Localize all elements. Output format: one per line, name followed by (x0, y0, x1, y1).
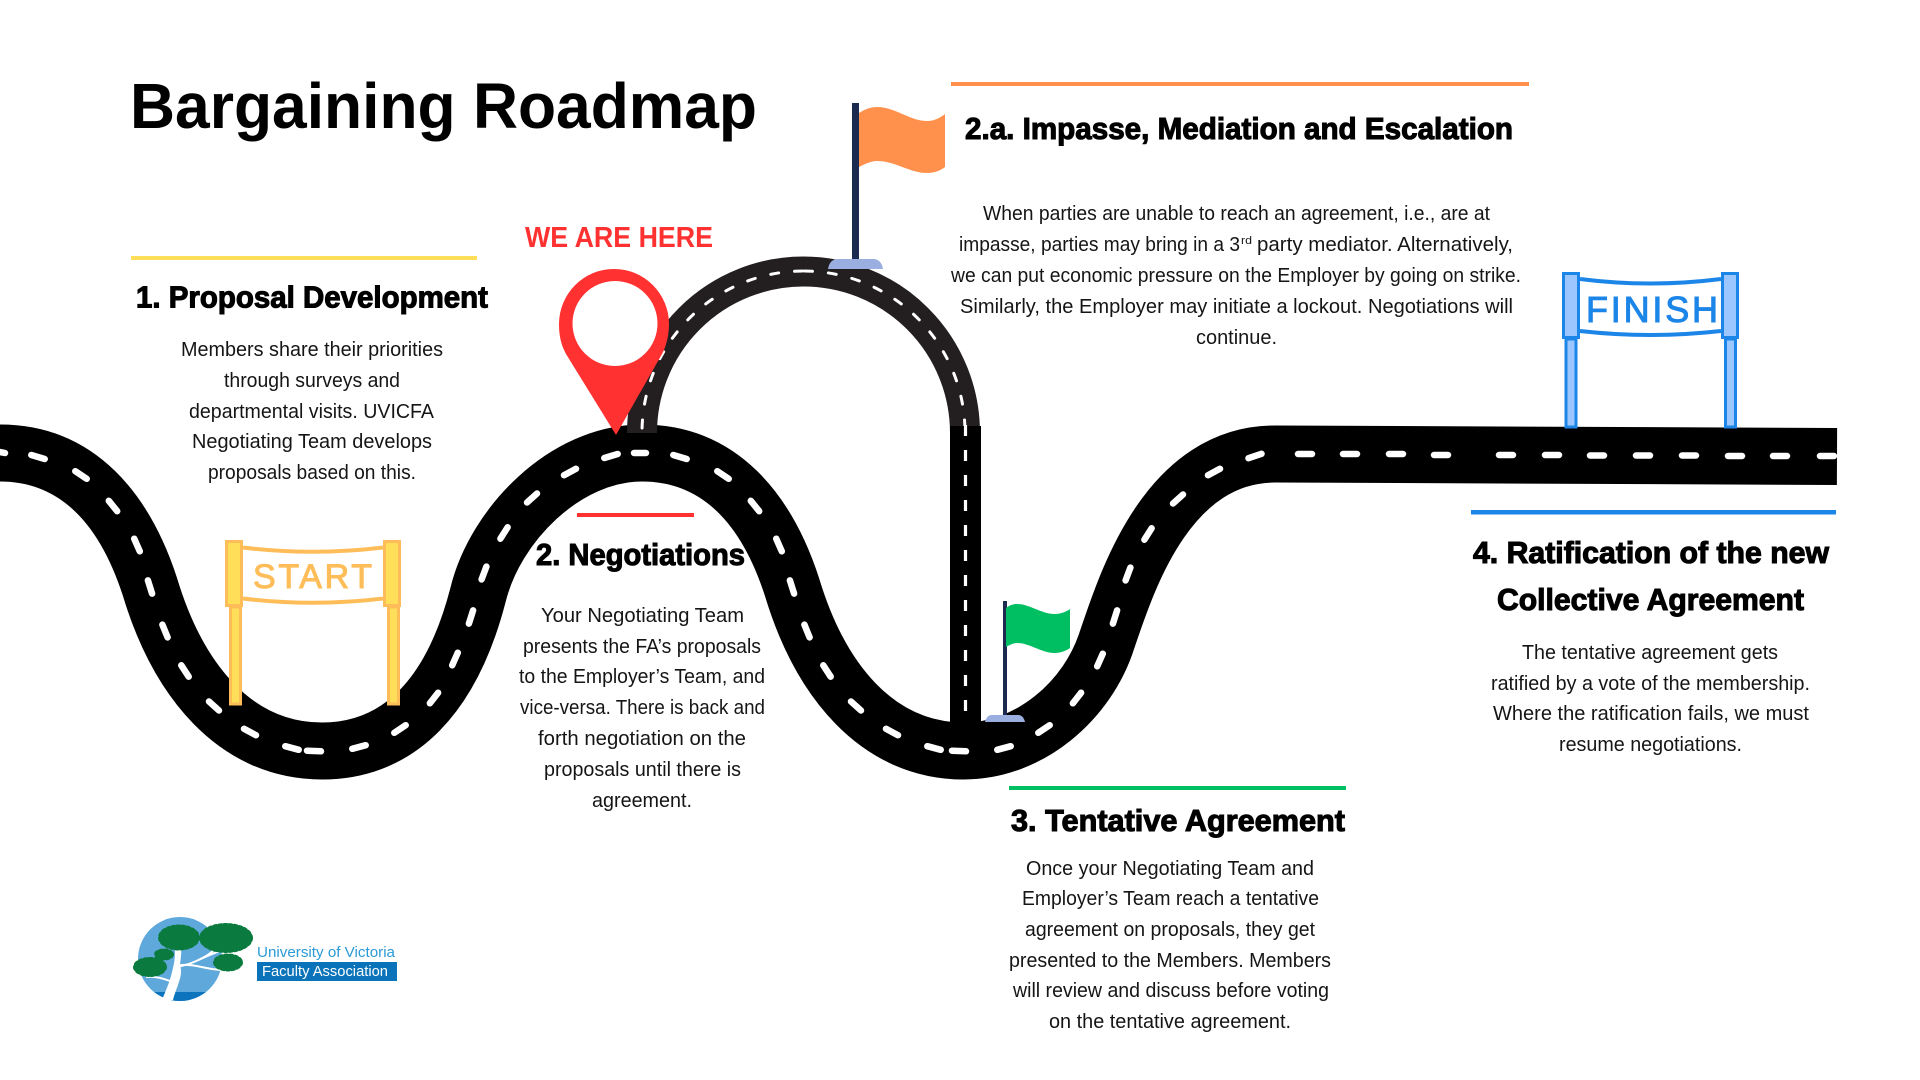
heading: step 3: 3. Tentative Agreement (1011, 803, 1345, 838)
text block: step 2: proposals until there is (544, 759, 741, 781)
icon: green flag (985, 601, 1070, 722)
panel: proposal development (131, 256, 488, 484)
text block: step 1: through surveys and (224, 370, 400, 392)
text block: step 2a: party mediator. Alternatively, (1257, 234, 1513, 256)
text block: step 3: Employer’s Team reach a tentative (1022, 888, 1319, 910)
text block: step 4: Where the ratification fails, we must (1493, 703, 1809, 725)
text block: step 1: Members share their priorities (181, 339, 443, 361)
text block: step 3 (1009, 858, 1331, 1033)
text block: step 2a: rd (1241, 235, 1252, 247)
logo name plate: Faculty Association (262, 963, 388, 980)
road: vertical return (950, 425, 981, 726)
icon: tree and circle (135, 917, 251, 1004)
text block: step 2: agreement. (592, 790, 692, 812)
text block: step 4 (1491, 642, 1810, 756)
text block: step 2: vice-versa. There is back and (520, 697, 765, 719)
text block: step 2 (519, 605, 765, 812)
text block: step 3: presented to the Members. Members (1009, 950, 1331, 972)
we are here label: WE ARE HERE (525, 222, 713, 254)
heading: step 4: 4. Ratification of the new (1473, 535, 1830, 570)
text block: step 3: Once your Negotiating Team and (1026, 858, 1314, 880)
heading: step 2: 2. Negotiations (536, 537, 745, 572)
text block: step 1: departmental visits. UVICFA (189, 401, 435, 423)
icon: finish banner: FINISH (1586, 289, 1718, 330)
text block: step 1 (181, 339, 443, 484)
panel: impasse, mediation and escalation (950, 82, 1529, 349)
road: escalation arc (642, 271, 965, 433)
text block: step 2: Your Negotiating Team (541, 605, 744, 627)
text block: step 2a: When parties are unable to reach an agreement, i.e., are at (983, 203, 1490, 225)
title: Bargaining Roadmap (130, 70, 757, 142)
panel: ratification (1471, 510, 1836, 756)
logo: University of Victoria Faculty Association (135, 917, 397, 1004)
text block: step 3: on the tentative agreement. (1049, 1011, 1291, 1033)
text block: step 4: resume negotiations. (1559, 734, 1742, 756)
panel: tentative agreement (1009, 786, 1346, 1033)
icon: orange flag (828, 103, 945, 269)
heading: step 4 (1473, 535, 1830, 617)
text block: step 3: will review and discuss before voting (1012, 980, 1329, 1002)
text block: step 2: to the Employer’s Team, and (519, 666, 765, 688)
icon: finish banner (1564, 274, 1738, 427)
heading: step 1: 1. Proposal Development (136, 280, 488, 314)
icon: start banner (226, 542, 400, 704)
text block: step 2: forth negotiation on the (538, 728, 746, 750)
text block: step 4: ratified by a vote of the membership. (1491, 673, 1810, 695)
text block: step 2a (950, 203, 1521, 349)
logo wordmark: University of Victoria (257, 944, 396, 961)
text block: step 2a: we can put economic pressure on the Employer by going on strike. (950, 265, 1521, 287)
road: main winding route (0, 452, 1837, 751)
text block: step 3: agreement on proposals, they get (1025, 919, 1315, 941)
icon: start banner: START (253, 558, 372, 596)
heading: step 4: Collective Agreement (1497, 582, 1804, 617)
text block: step 2a: continue. (1196, 327, 1277, 349)
heading: step 2a: 2.a. Impasse, Mediation and Escalation (965, 111, 1513, 146)
text block: step 2a: Similarly, the Employer may initiate a lockout. Negotiations will (960, 296, 1513, 318)
text block: step 1: Negotiating Team develops (192, 431, 432, 453)
text block: step 4: The tentative agreement gets (1522, 642, 1778, 664)
text block: step 1: proposals based on this. (208, 462, 416, 484)
text block: step 2a: impasse, parties may bring in a 3 (959, 234, 1240, 256)
text block: step 2: presents the FA’s proposals (523, 636, 761, 658)
panel: negotiations (519, 513, 765, 812)
icon: location pin (559, 269, 669, 435)
